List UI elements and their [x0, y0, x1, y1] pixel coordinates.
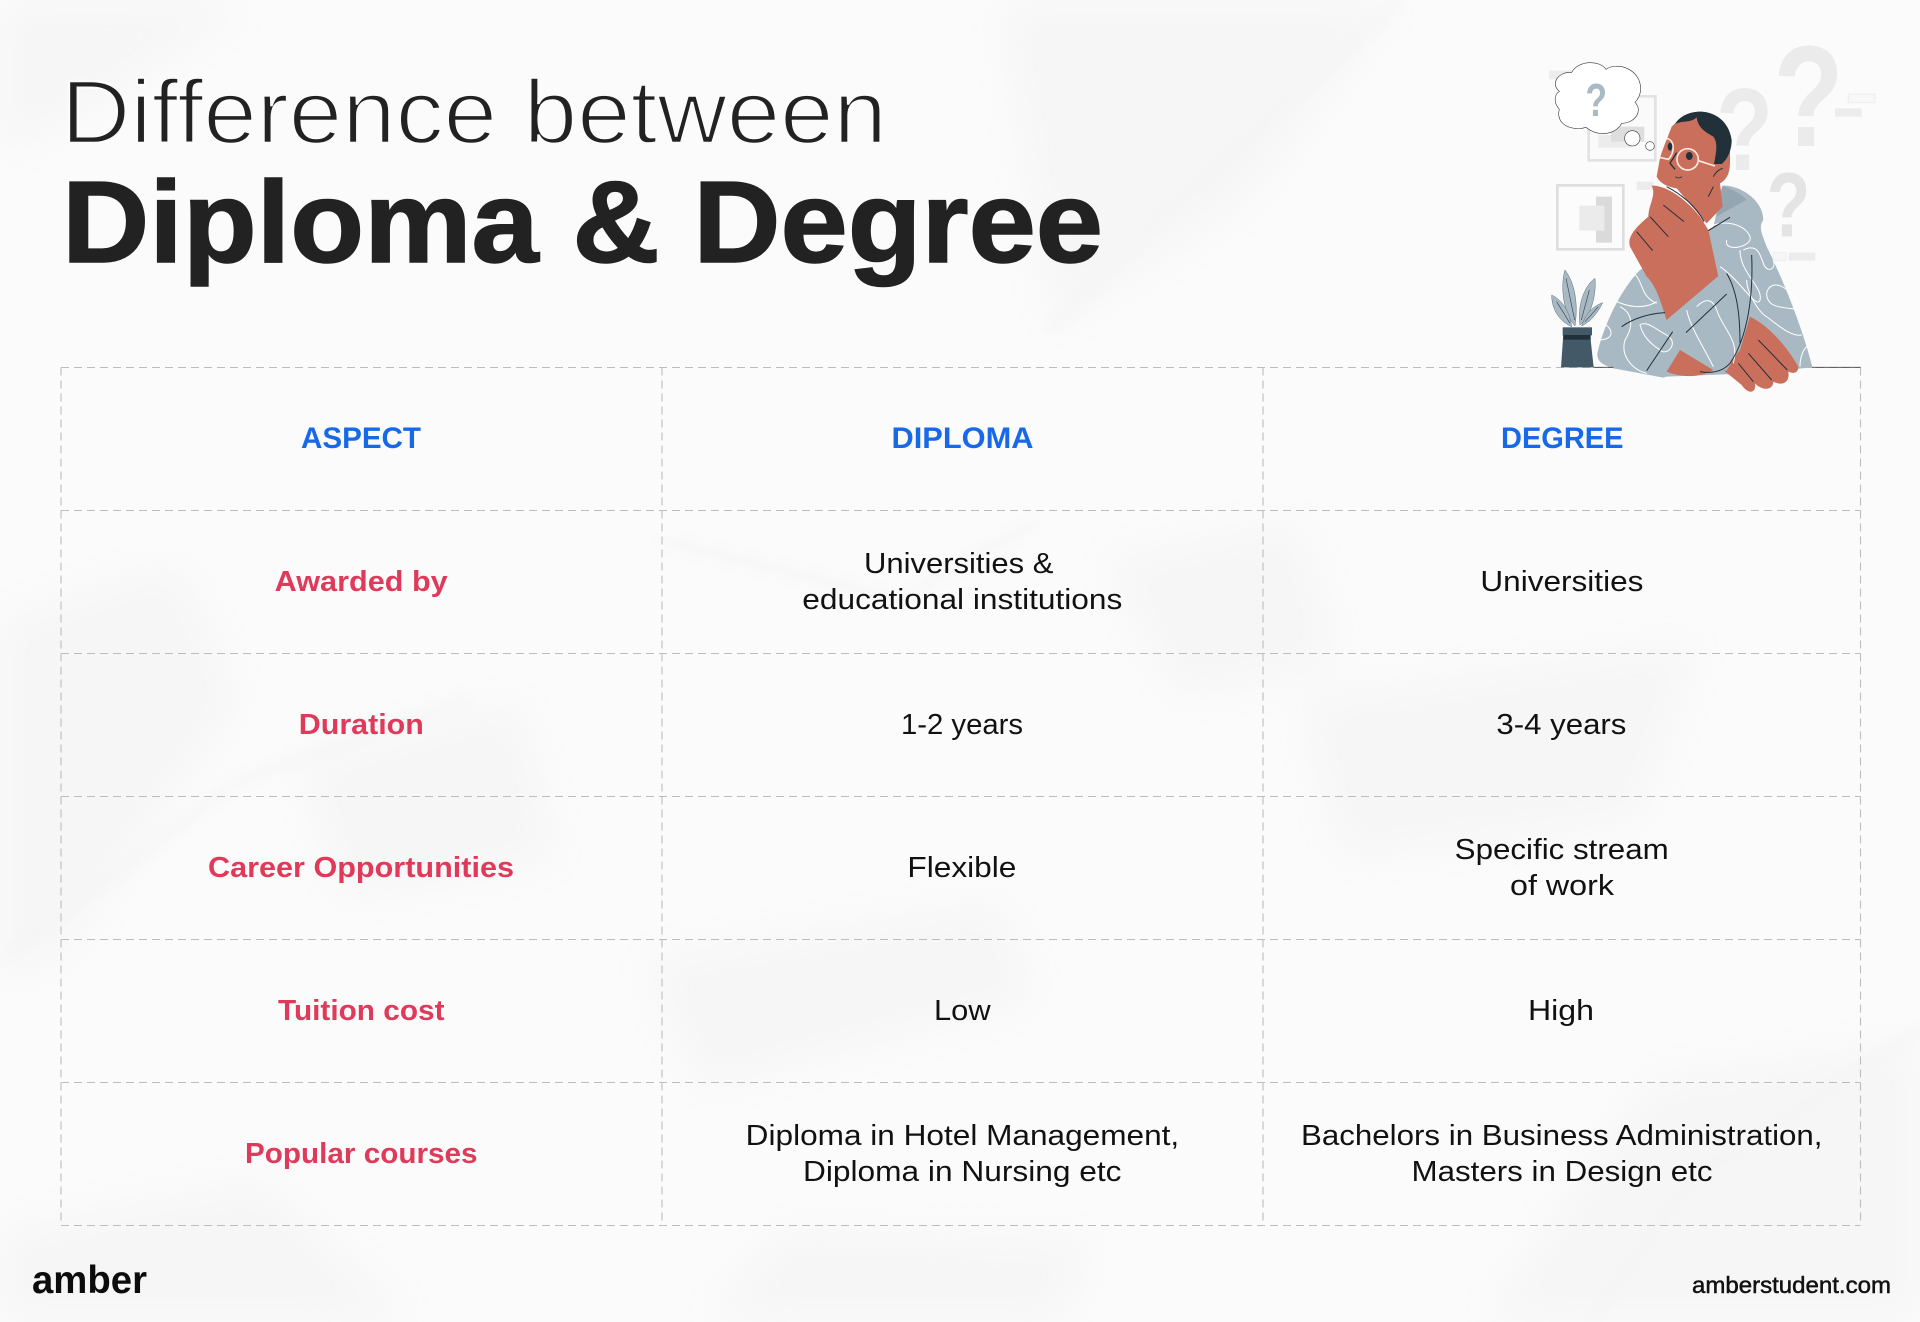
cell: diploma courses: Diploma in Hotel Management,	[746, 1120, 1179, 1152]
cell: diploma duration: 1-2 years	[901, 709, 1023, 741]
cell: degree career	[1455, 834, 1669, 902]
footer logo: amber: amber	[32, 1259, 147, 1302]
thought bubble: ?	[1585, 74, 1607, 126]
footer url: amberstudent.com	[1692, 1272, 1891, 1298]
neck and head	[1657, 112, 1732, 223]
row label: Tuition cost: Tuition cost	[278, 995, 445, 1027]
title	[61, 63, 1103, 287]
title line: Diploma & Degree: Diploma & Degree	[62, 157, 1103, 287]
raised hand	[1629, 186, 1718, 320]
cell: diploma tuition: Low	[934, 995, 992, 1027]
cell: degree tuition: High	[1528, 995, 1594, 1027]
cell: diploma awarded by: educational institutions	[802, 584, 1122, 616]
question marks	[1716, 16, 1844, 257]
cell: degree courses: Masters in Design etc	[1412, 1156, 1712, 1188]
cell: diploma awarded by: Universities &	[864, 548, 1053, 580]
table top line	[1593, 366, 1861, 369]
plant	[1552, 270, 1603, 367]
cell: diploma courses: Diploma in Nursing etc	[803, 1156, 1122, 1188]
cell: degree courses: Bachelors in Business Administration,	[1301, 1120, 1822, 1152]
wall decorations	[1549, 71, 1875, 261]
header: DEGREE: DEGREE	[1501, 422, 1624, 455]
cell: degree career: Specific stream	[1455, 834, 1669, 866]
hoodie	[1597, 186, 1812, 378]
header: ASPECT: ASPECT	[301, 422, 421, 455]
row label: Career Opportunities: Career Opportunities	[208, 852, 514, 884]
cell: degree career: of work	[1510, 870, 1615, 902]
row label: Popular courses: Popular courses	[245, 1138, 478, 1170]
cell: degree duration: 3-4 years	[1496, 709, 1626, 741]
row label: Duration: Duration	[299, 709, 424, 741]
question marks: ?	[1767, 155, 1810, 257]
header: DIPLOMA: DIPLOMA	[892, 422, 1034, 455]
question marks: ?	[1773, 16, 1844, 177]
question marks: ?	[1716, 65, 1773, 195]
folded forearm with hand	[1622, 217, 1798, 392]
illustration: thinking person	[1549, 16, 1875, 392]
cell: diploma courses	[746, 1120, 1179, 1188]
thought bubble	[1555, 63, 1654, 150]
cell: degree courses	[1301, 1120, 1822, 1188]
cell: degree awarded by: Universities	[1480, 566, 1643, 598]
comparison table grid	[61, 368, 1860, 1226]
row label: Awarded by: Awarded by	[275, 566, 448, 598]
cell: diploma career: Flexible	[907, 852, 1016, 884]
cell: diploma awarded by	[802, 548, 1122, 616]
title line: Difference between: Difference between	[61, 63, 887, 163]
